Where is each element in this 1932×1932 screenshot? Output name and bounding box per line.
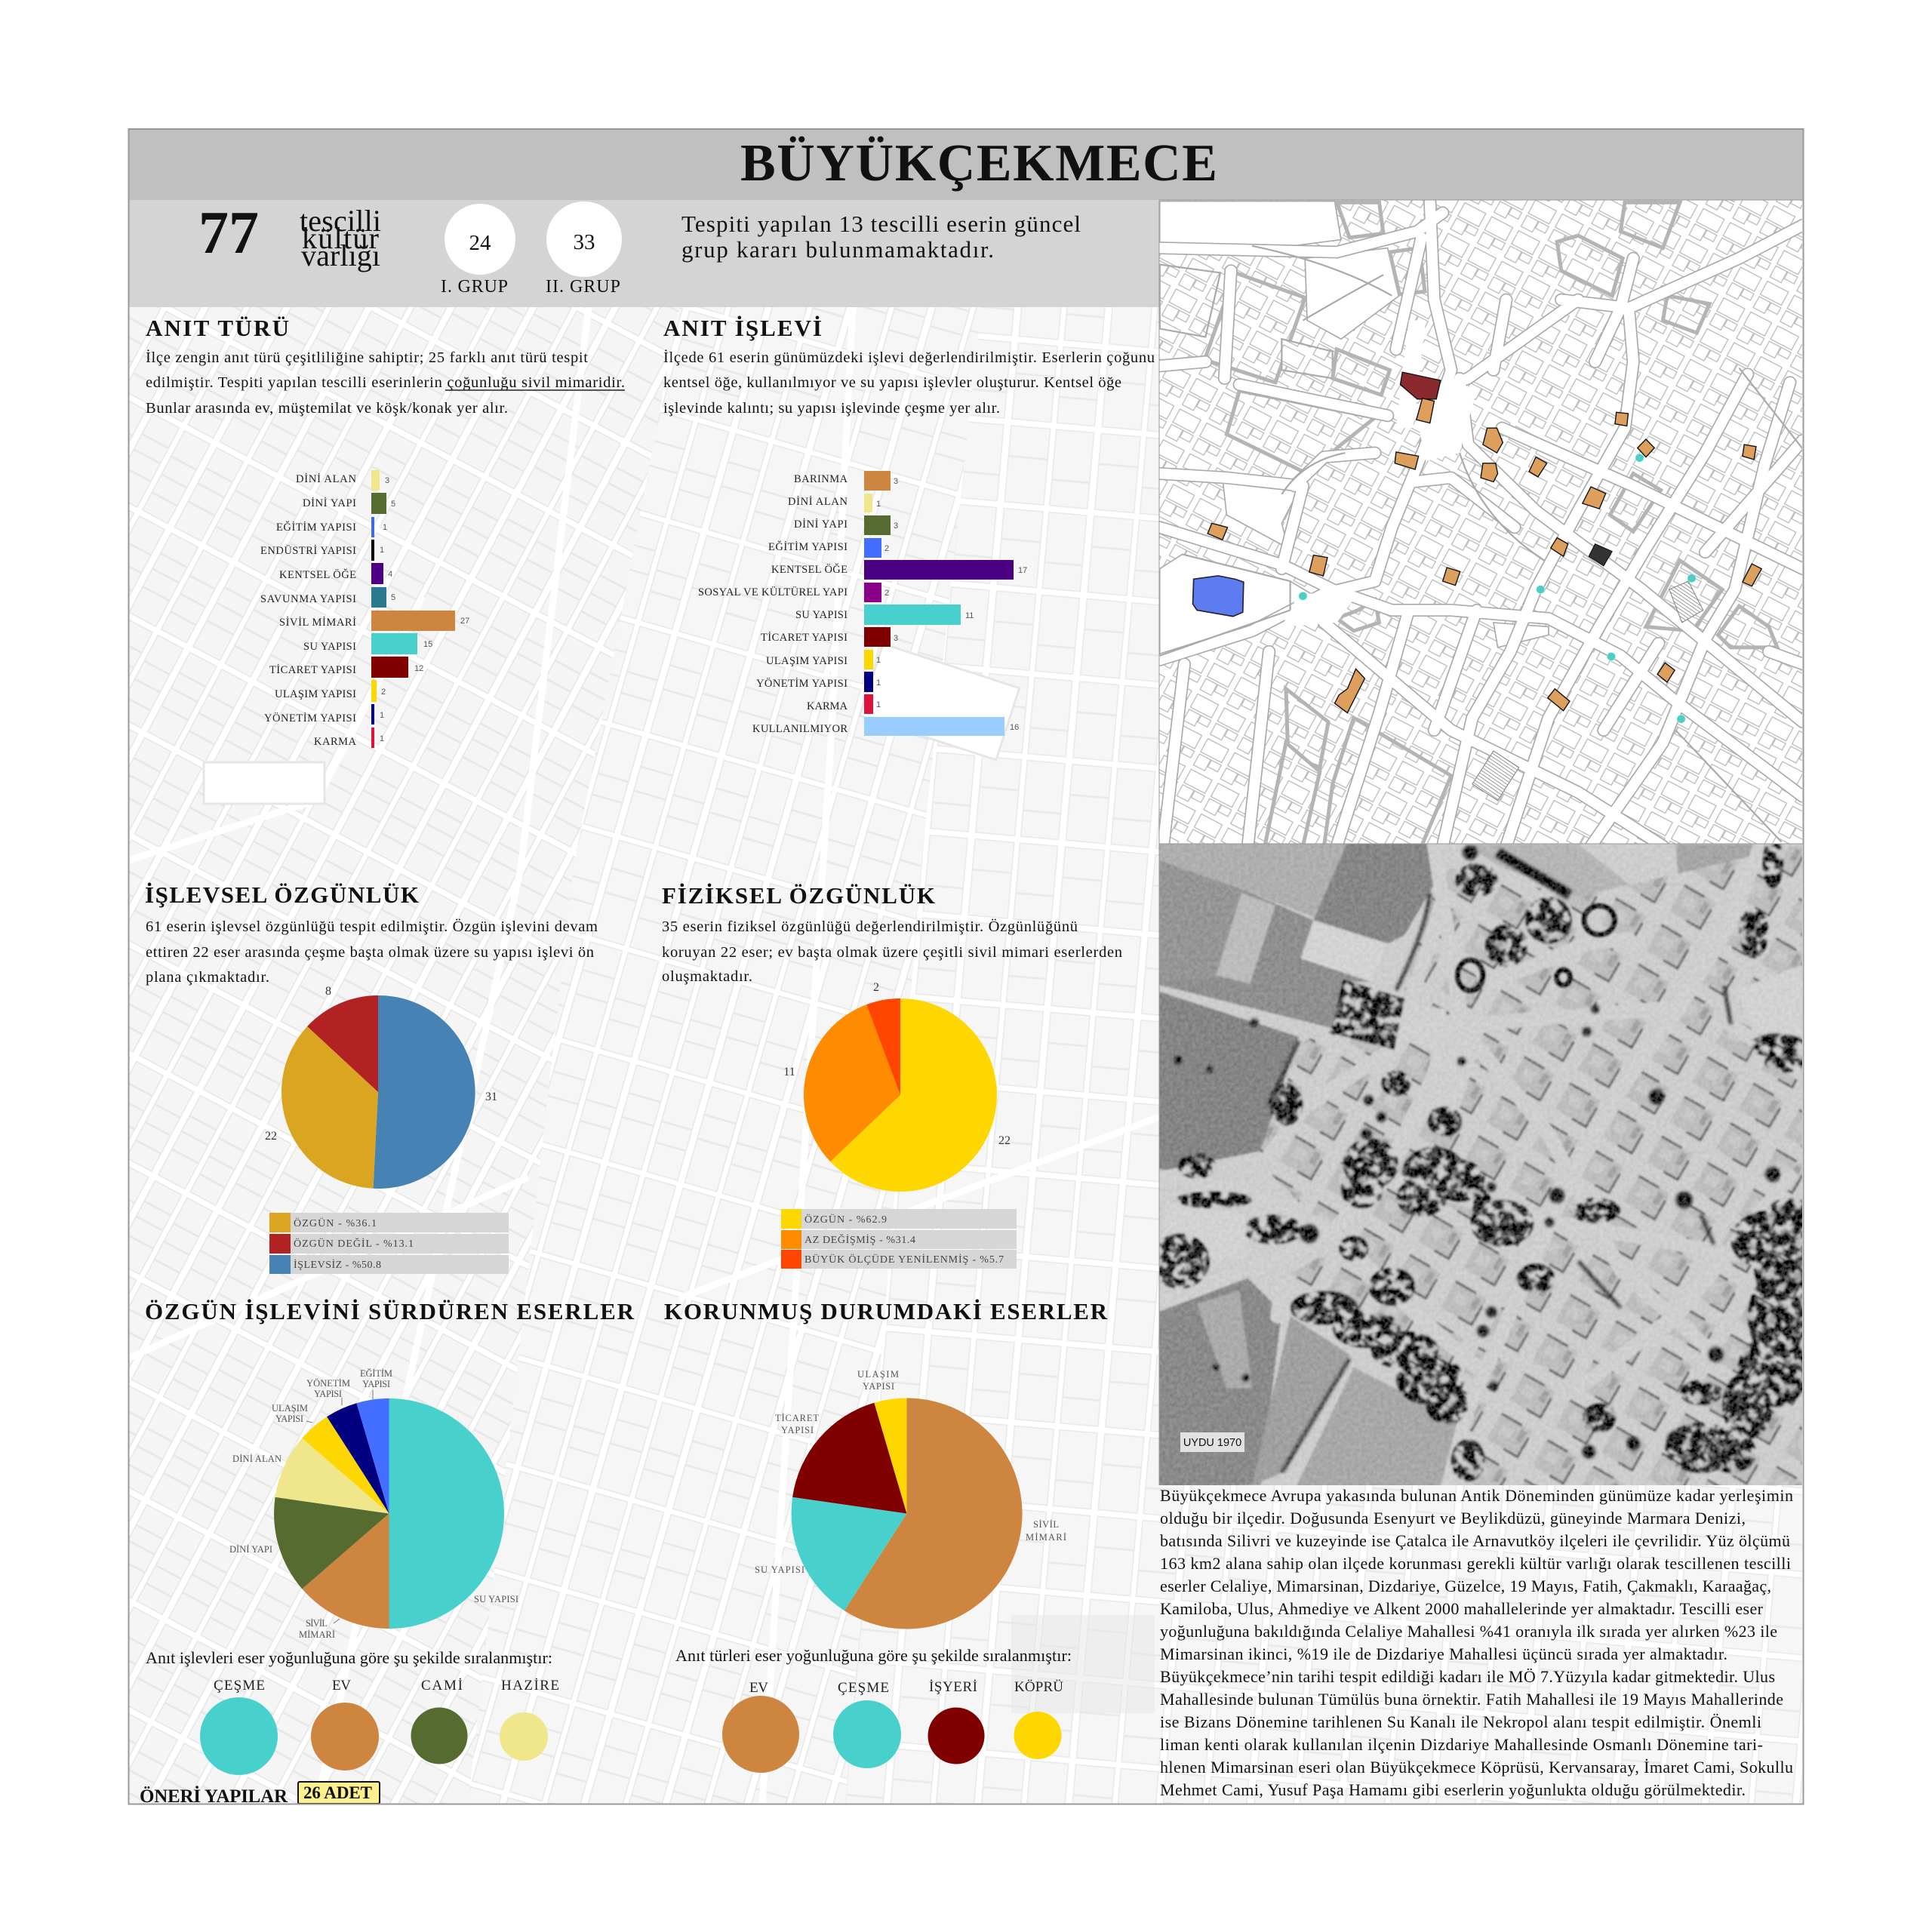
bar chart: anıt işlevi: 1 [876, 500, 881, 509]
bar chart: anıt türü: YÖNETİM YAPISI [264, 712, 356, 724]
bar chart: anıt işlevi: KENTSEL ÖĞE [771, 563, 848, 576]
big number: 77 [198, 200, 259, 266]
text block: district description: Mehmet Cami, Yusuf Paşa Hamamı gibi eserlerin yoğunlukta olduğu görülmektedir. [1160, 1780, 1746, 1799]
text block [146, 349, 625, 417]
bar chart: anıt türü: 2 [381, 688, 386, 697]
legend: AZ DEĞİŞMİŞ - %31.4 [804, 1233, 915, 1246]
text block: İlçe zengin anıt türü çeşitliliğine sahiptir; 25 farklı anıt türü tespit [146, 349, 588, 366]
bar chart: anıt işlevi: 17 [1018, 566, 1027, 575]
text block: district description: hlenen Mimarsinan eseri olan Büyükçekmece Köprüsü, Kervansaray, İmaret Cami, Sokullu [1160, 1758, 1793, 1777]
bar chart: anıt türü: 1 [380, 711, 384, 720]
bar chart: anıt işlevi: BARINMA [794, 473, 848, 485]
text block: district description: eserler Celaliye, Mimarsinan, Dizdariye, Güzelce, 19 Mayıs, Fatih, Çakmaklı, Karaağaç, [1160, 1577, 1771, 1595]
panel: işlevsel özgünlük [145, 881, 598, 1274]
pie chart: YAPISI [362, 1379, 390, 1389]
map: cadastral plan with monuments [1155, 196, 1820, 851]
text block: district description: Mimarsinan ikinci, %19 ile de Dizdariye Mahallesi üçüncü sırada yer almaktadır. [1160, 1644, 1727, 1663]
bar chart: anıt türü: SAVUNMA YAPISI [260, 593, 356, 605]
satellite: roads [1160, 844, 1803, 1490]
bar chart: anıt türü: KENTSEL ÖĞE [279, 568, 356, 581]
ranking sentence: Anıt türleri eser yoğunluğuna göre şu şekilde sıralanmıştır: [675, 1646, 1072, 1665]
pie chart: YÖNETİM [306, 1378, 350, 1389]
legend [269, 1213, 509, 1274]
text block: Bunlar arasında ev, müştemilat ve köşk/konak yer alır. [146, 400, 508, 417]
pie chart: SU YAPISI [755, 1564, 804, 1575]
text block: 61 eserin işlevsel özgünlüğü tespit edilmiştir. Özgün işlevini devam [146, 918, 598, 935]
bar chart: anıt işlevi: TİCARET YAPISI [761, 632, 848, 644]
outer frame [128, 129, 1804, 1804]
pie chart: 11 [783, 1066, 795, 1078]
text block: district description: Kamiloba, Ulus, Ahmediye ve Alkent 2000 mahallelerinde yer almaktadır. Tescilli eser [1160, 1599, 1764, 1618]
bar chart: anıt türü: 1 [383, 523, 387, 532]
pie chart: EĞİTİM [360, 1368, 392, 1379]
stat caption: tescilli [300, 204, 381, 238]
pie chart: 22 [265, 1130, 277, 1143]
bar chart: anıt türü: 5 [391, 500, 395, 509]
bar chart: anıt işlevi: KULLANILMIYOR [752, 723, 848, 735]
text block [662, 918, 1122, 985]
pie chart [755, 1369, 1066, 1629]
legend: ÖZGÜN DEĞİL - %13.1 [294, 1237, 414, 1250]
pie chart: MİMARİ [299, 1629, 335, 1640]
title band [128, 129, 1804, 200]
text block: district description: 163 km2 alana sahip olan ilçede korunması gerekli kültür varlığı olarak tescillenen tescilli [1160, 1554, 1791, 1573]
map: hatched buildings [1472, 581, 1703, 801]
map: civil architecture buildings [1208, 398, 1761, 713]
text block: koruyan 22 eser; ev başta olmak üzere çeşitli sivil mimari eserlerden [662, 944, 1122, 961]
bar chart: anıt türü: 1 [380, 546, 384, 555]
text block: ettiren 22 eser arasında çeşme başta olmak üzere su yapısı işlevi ön [146, 944, 594, 961]
map: junction spaces [1281, 321, 1477, 626]
pie chart: YAPISI [863, 1381, 894, 1392]
heading: KORUNMUŞ DURUMDAKİ ESERLER [664, 1298, 1108, 1324]
ranking: CAMİ: CAMİ [421, 1678, 463, 1694]
satellite caption: UYDU 1970 [1183, 1437, 1241, 1449]
legend: ÖZGÜN - %62.9 [804, 1213, 887, 1226]
bar chart: anıt işlevi: 3 [894, 521, 898, 531]
text block: 35 eserin fiziksel özgünlüğü değerlendirilmiştir. Özgünlüğünü [662, 918, 1078, 935]
heading: ANIT TÜRÜ [146, 315, 289, 341]
bar chart: anıt işlevi: 1 [876, 700, 881, 709]
ranking: KÖPRÜ: KÖPRÜ [1014, 1679, 1063, 1695]
bar chart: anıt türü: KARMA [314, 736, 357, 748]
text block: plana çıkmaktadır. [146, 969, 269, 986]
stat caption [300, 204, 381, 272]
satellite: dark lines and single trees [1174, 845, 1780, 1473]
satellite: fields [1155, 838, 1756, 1490]
group I circle: 24 [469, 231, 491, 255]
pie chart: DİNİ YAPI [229, 1544, 272, 1555]
heading: ANIT İŞLEVİ [663, 315, 822, 341]
stat note [681, 211, 1081, 263]
text block: district description: yoğunluğuna bakıldığında Celaliye Mahallesi %41 oranıyla ilk sırada yer alırken %23 ile [1160, 1622, 1777, 1641]
group I circle: I. GRUP [441, 277, 508, 297]
pie chart: ULAŞIM [272, 1403, 308, 1414]
bar chart: anıt işlevi: DİNİ YAPI [794, 518, 848, 531]
map: commercial buildings [1400, 372, 1441, 399]
bar chart: anıt işlevi: YÖNETİM YAPISI [756, 677, 848, 690]
pie chart: 22 [998, 1134, 1011, 1147]
stat caption: varlığı [301, 238, 380, 272]
pie chart: 8 [325, 985, 331, 998]
map: open areas [1160, 202, 1549, 656]
text block: district description: ise Bizans Dönemine tarihlenen Su Kanalı ile Nekropol alanı tespit edilmiştir. Önemli [1160, 1712, 1761, 1731]
ranking: CAMİ [411, 1678, 468, 1764]
heading: ÖZGÜN İŞLEVİNİ SÜRDÜREN ESERLER [145, 1298, 635, 1324]
bar chart: anıt türü: SİVİL MİMARİ [279, 617, 356, 629]
ranking: İŞYERİ [928, 1679, 984, 1764]
map: boundary lines [1160, 246, 1803, 842]
map: industrial building [1589, 544, 1612, 566]
faint city map background [128, 307, 1802, 1804]
satellite: town houses [1257, 844, 1803, 1490]
text block [146, 918, 598, 986]
bar chart: anıt türü: TİCARET YAPISI [269, 664, 356, 676]
pie chart: SU YAPISI [474, 1594, 518, 1604]
stat note: Tespiti yapılan 13 tescilli eserin güncel [681, 211, 1081, 237]
ranking: EV [311, 1678, 379, 1770]
legend: ÖZGÜN - %36.1 [294, 1217, 377, 1229]
text block: district description: Mahallesinde bulunan Tümülüs buna örnektir. Fatih Mahallesi ile 19 Mayıs Mahallerinde [1160, 1690, 1783, 1709]
text block: district description: batısında Silivri ve kuzeyinde ise Çatalca ile Arnavutköy ilçeleri ile çevrilidir. Yüz ölçümü [1160, 1531, 1790, 1550]
pie chart [783, 981, 1011, 1192]
panel: özgün işlevini sürdüren eserler [140, 1298, 635, 1807]
text block [663, 349, 1155, 417]
bar chart: anıt işlevi: 1 [876, 656, 881, 665]
ranking sentence: Anıt işlevleri eser yoğunluğuna göre şu şekilde sıralanmıştır: [146, 1648, 552, 1667]
pie chart: SİVİL [306, 1618, 328, 1629]
proposed structures label: ÖNERİ YAPILAR [140, 1786, 288, 1807]
text block: oluşmaktadır. [662, 968, 752, 985]
bar chart: anıt türü: 5 [391, 593, 395, 602]
text block: district description: liman kenti olarak kullanılan ilçenin Dizdariye Mahallesinde Osmanlı Dönemine tari- [1160, 1735, 1763, 1754]
stat caption: kültür [302, 221, 379, 255]
map: street blocks [1160, 202, 1777, 846]
legend [781, 1209, 1017, 1269]
bar chart: anıt türü: 1 [380, 734, 384, 743]
bar chart: anıt işlevi [698, 471, 1027, 736]
bar chart: anıt işlevi: DİNİ ALAN [788, 496, 848, 508]
bar chart: anıt türü: ENDÜSTRİ YAPISI [260, 544, 356, 557]
ranking: ÇEŞME [833, 1680, 901, 1768]
ranking: EV: EV [749, 1680, 768, 1696]
pie chart [265, 985, 497, 1189]
panel: fiziksel özgünlük [662, 882, 1122, 1269]
bar chart: anıt türü: 27 [460, 617, 469, 626]
group II circle [546, 202, 622, 297]
ranking: ÇEŞME: ÇEŞME [214, 1678, 265, 1694]
pie chart: DİNİ ALAN [232, 1454, 281, 1464]
bar chart: anıt türü: EĞİTİM YAPISI [276, 521, 356, 534]
bar chart: anıt türü: DİNİ YAPI [303, 497, 356, 509]
bar chart: anıt işlevi: 1 [876, 678, 881, 688]
satellite photo 1970 [1150, 838, 1820, 1490]
bar chart: anıt işlevi: EĞİTİM YAPISI [768, 540, 848, 553]
text block: district description [1160, 1486, 1793, 1799]
bar chart: anıt işlevi: 16 [1010, 723, 1019, 732]
pie chart: YAPISI [314, 1389, 342, 1399]
map: roads [1160, 202, 1803, 846]
panel: anıt işlevi [663, 315, 1155, 736]
group II circle: 33 [574, 230, 595, 254]
text block: kentsel öğe, kullanılmıyor ve su yapısı işlevler oluşturur. Kentsel öğe [663, 374, 1121, 391]
legend: İŞLEVSİZ - %50.8 [294, 1259, 381, 1271]
ranking: HAZİRE [500, 1678, 559, 1761]
ranking: EV: EV [332, 1678, 351, 1694]
bar chart: anıt işlevi: ULAŞIM YAPISI [766, 655, 848, 667]
pie chart: ULAŞIM [857, 1369, 899, 1380]
map: water structures [1299, 454, 1696, 723]
proposed structures count: 26 ADET [303, 1783, 372, 1802]
bar chart: anıt türü [260, 470, 469, 748]
bar chart: anıt işlevi: 2 [884, 544, 889, 553]
bar chart: anıt işlevi: 2 [884, 589, 889, 598]
bar chart: anıt türü: DİNİ ALAN [296, 473, 357, 485]
bar chart: anıt işlevi: 3 [894, 634, 898, 643]
bar chart: anıt türü: SU YAPISI [303, 641, 356, 653]
text block: district description: Büyükçekmece’nin tarihi tespit edildiği kadarı ile MÖ 7.Yüzyıla kadar gitmektedir. Ulus [1160, 1667, 1775, 1686]
stats band [128, 200, 1159, 307]
ranking: ÇEŞME [200, 1678, 278, 1775]
pie chart: YAPISI [275, 1414, 303, 1424]
satellite caption [1180, 1432, 1244, 1452]
pie chart: 31 [485, 1091, 497, 1103]
ranking: KÖPRÜ [1014, 1679, 1063, 1759]
pie chart: TİCARET [775, 1413, 819, 1423]
satellite: ring hedges [1457, 906, 1614, 991]
text block: edilmiştir. Tespiti yapılan tescilli eserinlerin çoğunluğu sivil mimaridir. [146, 374, 625, 391]
bar chart: anıt türü: 15 [423, 640, 432, 649]
bar chart: anıt işlevi: 3 [894, 477, 898, 486]
stat note: grup kararı bulunmamaktadır. [681, 236, 994, 263]
bar chart: anıt işlevi: SU YAPISI [795, 609, 848, 621]
panel: anıt türü [146, 315, 625, 748]
group I circle [441, 204, 515, 297]
bar chart: anıt işlevi: SOSYAL VE KÜLTÜREL YAPI [698, 586, 848, 598]
pie chart: MİMARİ [1026, 1532, 1066, 1543]
heading: İŞLEVSEL ÖZGÜNLÜK [145, 881, 419, 908]
bar chart: anıt türü: 3 [385, 476, 389, 485]
satellite: dark vegetation [1150, 838, 1817, 1481]
ranking: ÇEŞME: ÇEŞME [838, 1680, 889, 1696]
group II circle: II. GRUP [546, 277, 620, 297]
pie chart: YAPISI [781, 1425, 814, 1435]
bar chart: anıt türü: 12 [414, 664, 423, 673]
text block: işlevinde kalıntı; su yapısı işlevinde çeşme yer alır. [663, 400, 1000, 417]
text block: district description: olduğu bir ilçedir. Doğusunda Esenyurt ve Beylikdüzü, güneyinde Marmara Denizi, [1160, 1509, 1746, 1527]
legend: BÜYÜK ÖLÇÜDE YENİLENMİŞ - %5.7 [804, 1253, 1004, 1266]
ranking: EV [722, 1680, 799, 1773]
map: education building [1193, 576, 1244, 617]
pie chart [229, 1368, 518, 1640]
panel: korunmuş durumdaki eserler [664, 1298, 1108, 1773]
text block: district description: Büyükçekmece Avrupa yakasında bulunan Antik Döneminden günümüze kadar yerleşimin [1160, 1486, 1793, 1505]
pie chart: SİVİL [1033, 1519, 1059, 1530]
heading: FİZİKSEL ÖZGÜNLÜK [662, 882, 935, 909]
pie chart: 2 [873, 981, 879, 994]
bar chart: anıt işlevi: KARMA [807, 700, 848, 712]
bar chart: anıt türü: 4 [388, 570, 392, 579]
ranking: İŞYERİ: İŞYERİ [929, 1679, 977, 1695]
title: BÜYÜKÇEKMECE [740, 134, 1217, 192]
text block: İlçede 61 eserin günümüzdeki işlevi değerlendirilmiştir. Eserlerin çoğunu [663, 349, 1155, 366]
ranking: HAZİRE: HAZİRE [501, 1678, 559, 1694]
bar chart: anıt işlevi: 11 [965, 611, 974, 620]
bar chart: anıt türü: ULAŞIM YAPISI [275, 688, 356, 700]
